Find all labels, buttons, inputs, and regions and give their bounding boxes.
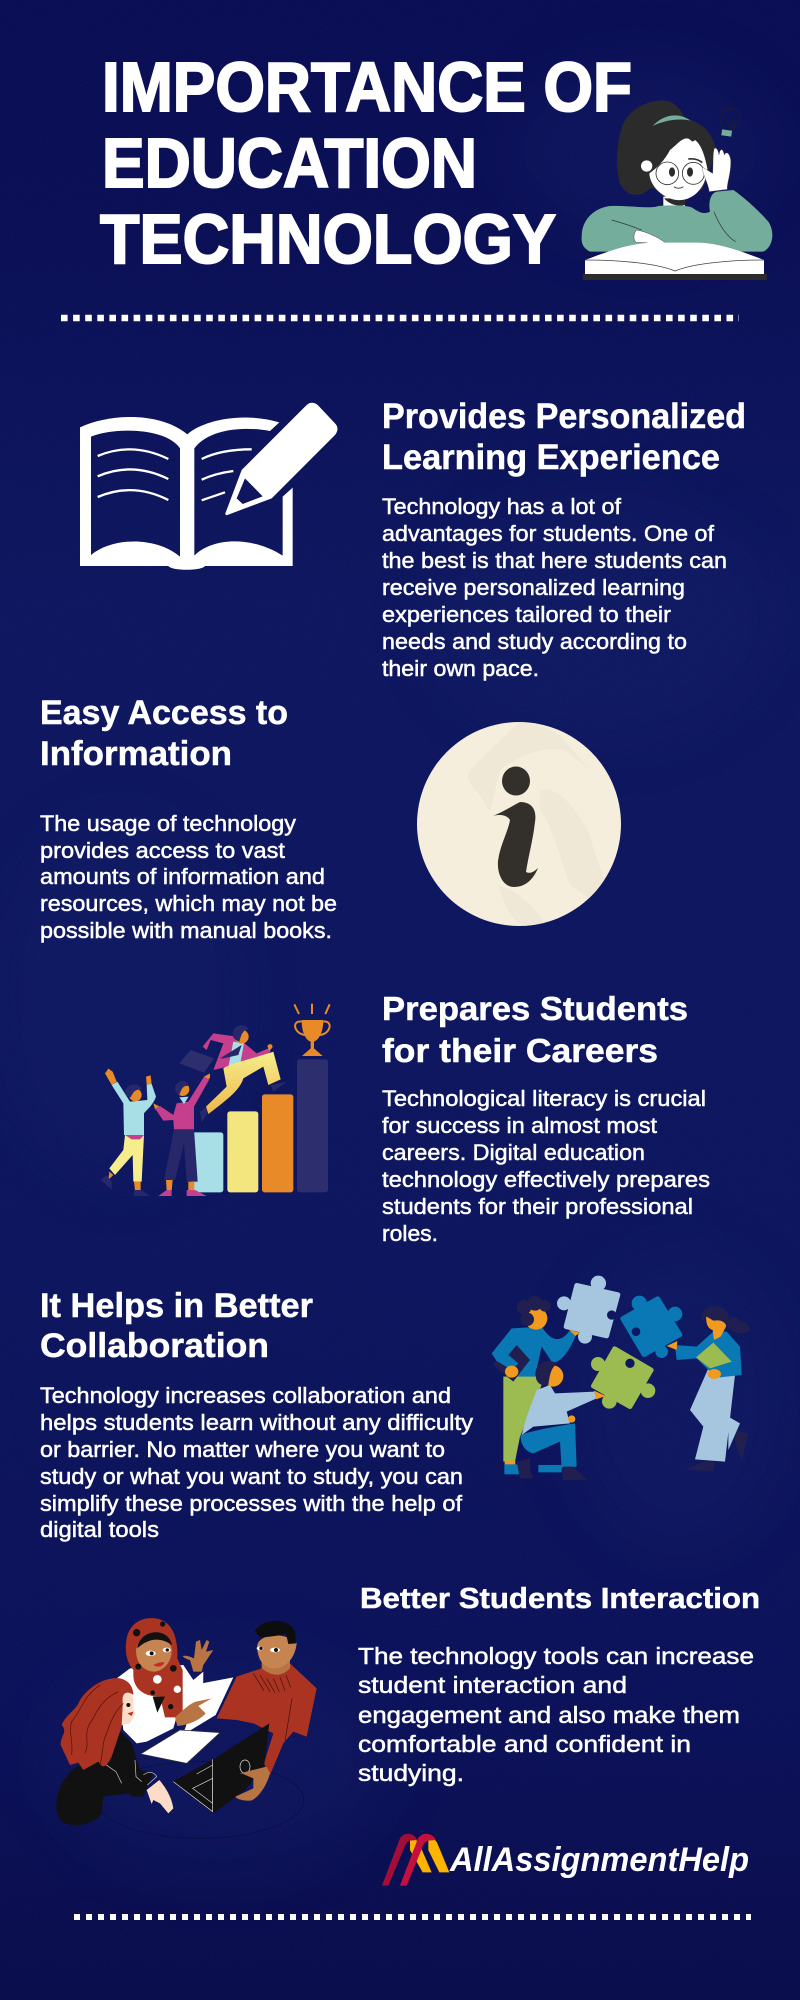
heading	[382, 990, 688, 1069]
heading: Learning Experience	[382, 438, 720, 477]
body text	[382, 494, 727, 681]
body text: engagement and also make them	[358, 1702, 740, 1728]
body text: their own pace.	[382, 656, 539, 681]
body text: Technology increases collaboration and	[40, 1383, 451, 1408]
heading: Collaboration	[40, 1327, 269, 1365]
wordmark: AllAssignmentHelp	[449, 1841, 749, 1879]
body text: digital tools	[40, 1517, 159, 1542]
body text: or barrier. No matter where you want to	[40, 1437, 445, 1462]
body text: simplify these processes with the help of	[40, 1491, 463, 1516]
body text: amounts of information and	[40, 864, 325, 889]
body text: provides access to vast	[40, 838, 285, 863]
illustration: team assembling puzzle pieces	[492, 1278, 750, 1480]
body text: studying.	[358, 1760, 464, 1786]
body text: needs and study according to	[382, 629, 687, 654]
heading: Information	[40, 735, 232, 773]
body text: study or what you want to study, you can	[40, 1464, 463, 1489]
logo: AllAssignmentHelp	[382, 1834, 749, 1886]
body text: The usage of technology	[40, 811, 296, 836]
body text: careers. Digital education	[382, 1140, 645, 1165]
body text	[40, 1383, 473, 1542]
panel: personalized learning	[80, 397, 746, 681]
heading	[40, 694, 288, 773]
body text: The technology tools can increase	[358, 1643, 754, 1669]
body text: Technological literacy is crucial	[382, 1086, 706, 1111]
illustration: three students around a laptop	[56, 1618, 317, 1838]
heading: Provides Personalized	[382, 397, 746, 436]
icon: logo mark	[382, 1834, 449, 1886]
body text: student interaction and	[358, 1672, 627, 1698]
body text	[358, 1643, 754, 1786]
title: IMPORTANCE OF	[102, 48, 632, 126]
title: EDUCATION	[102, 124, 477, 202]
body text: roles.	[382, 1221, 438, 1246]
panel: prepares students for careers	[101, 990, 710, 1246]
panel: better students interaction	[56, 1583, 760, 1838]
heading: Prepares Students	[382, 990, 688, 1027]
heading: for their Careers	[382, 1032, 658, 1069]
icon: open book with pencil	[80, 403, 337, 570]
body text	[382, 1086, 710, 1246]
body text: Technology has a lot of	[382, 494, 622, 519]
body text: experiences tailored to their	[382, 602, 671, 627]
body text: receive personalized learning	[382, 575, 685, 600]
body text: helps students learn without any difficulty	[40, 1410, 473, 1435]
body text: students for their professional	[382, 1194, 693, 1219]
body text: advantages for students. One of	[382, 521, 715, 546]
body text: comfortable and confident in	[358, 1731, 691, 1757]
body text: technology effectively prepares	[382, 1167, 710, 1192]
body text: resources, which may not be	[40, 891, 337, 916]
panel: easy access to information	[40, 694, 621, 943]
icon: information circle	[417, 722, 621, 926]
divider: bottom dotted line	[74, 1914, 751, 1920]
body text	[40, 811, 337, 943]
heading: Easy Access to	[40, 694, 288, 732]
divider: top dotted line	[61, 315, 739, 321]
heading	[382, 397, 746, 477]
panel: better collaboration	[40, 1278, 750, 1542]
heading: Better Students Interaction	[360, 1583, 760, 1615]
body text: for success in almost most	[382, 1113, 657, 1138]
title: TECHNOLOGY	[100, 200, 556, 278]
body text: the best is that here students can	[382, 548, 727, 573]
heading	[40, 1287, 313, 1365]
title	[100, 48, 632, 278]
illustration: people climbing bar chart to trophy	[101, 1004, 330, 1196]
body text: possible with manual books.	[40, 918, 332, 943]
heading: It Helps in Better	[40, 1287, 313, 1325]
illustration: girl reading a book with glasses	[582, 100, 772, 280]
